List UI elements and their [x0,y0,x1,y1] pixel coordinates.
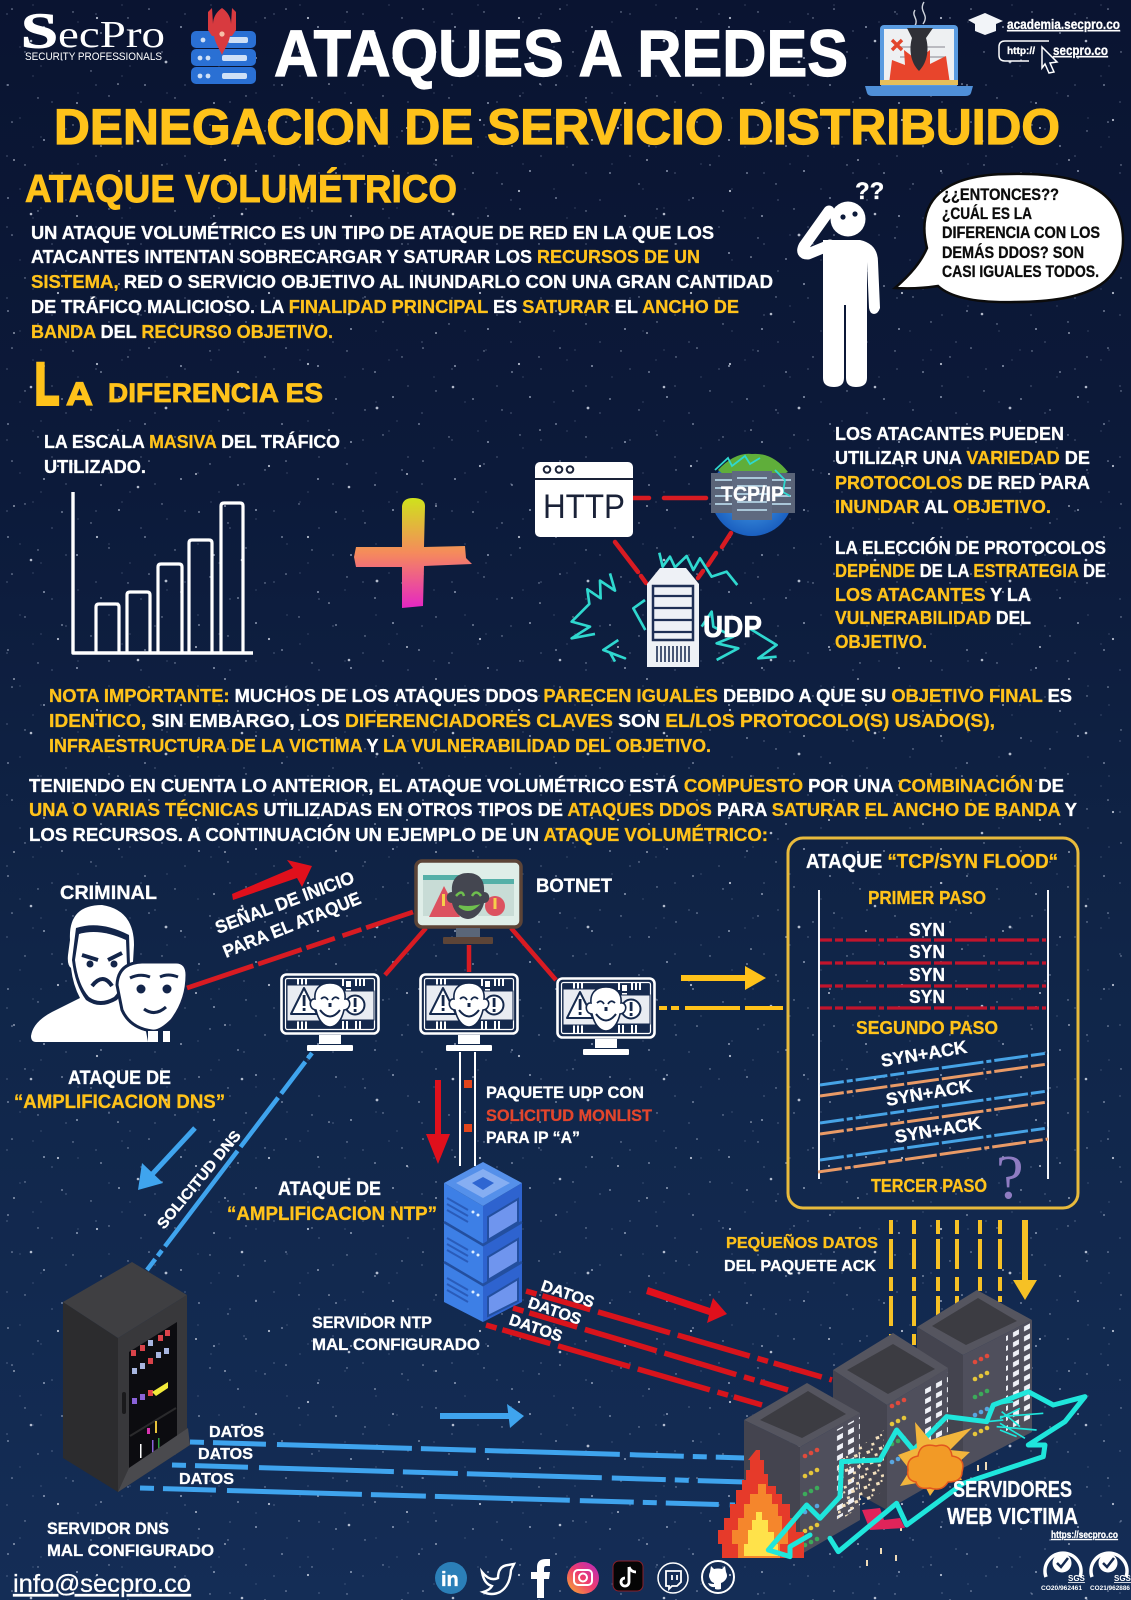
syn packets [909,920,945,1007]
label: misconfigured dns server: SERVIDOR DNS [47,1519,169,1538]
label: victim web servers: WEB VICTIMA [947,1503,1078,1529]
text block: composition of attack: UNA O VARIAS TÉCNICAS UTILIZADAS EN OTROS TIPOS DE ATAQUES DDOS PARA SATURAR EL ANCHO DE BANDA Y [29,799,1077,820]
icon: linkedin [435,1562,467,1594]
syn packets: SYN [909,987,945,1007]
text block: composition of attack: LOS RECURSOS. A CONTINUACIÓN UN EJEMPLO DE UN ATAQUE VOLUMÉTRICO: [29,824,768,845]
speech bubble: DEMÁS DDOS? SON [942,243,1084,262]
text block: udp packet [486,1083,653,1147]
text block: massive scale [44,431,340,477]
links: academia and secpro [968,13,1120,73]
rack 3 [917,1290,1032,1468]
social icons [435,1559,734,1598]
heading: la diferencia es [35,352,323,417]
icon: pixel fire [718,1450,804,1558]
rails [819,890,1048,1179]
icon: address box [999,41,1049,61]
labels: ntp data: DATOS [507,1312,565,1346]
logo: SecPro: S [21,2,58,58]
text block: important note: NOTA IMPORTANTE: MUCHOS DE LOS ATAQUES DDOS PARECEN IGUALES DEBIDO A QUE SU OBJETIVO FINAL ES [49,686,1072,706]
syn ack labels: SYN+ACK [884,1076,973,1110]
debris [838,1430,987,1566]
icon: twitch [658,1563,688,1593]
icon: confused person: ?? [855,178,884,205]
label: misconfigured ntp server [312,1313,480,1354]
heading: ataque volumetrico: ATAQUE VOLUMÉTRICO [25,167,457,211]
icon: cursor [1042,47,1057,73]
text block: definition: UN ATAQUE VOLUMÉTRICO ES UN TIPO DE ATAQUE DE RED EN LA QUE LOS [31,222,714,243]
heading: attack name: ATAQUE “TCP/SYN FLOOD“ [806,851,1058,873]
labels: dns data: DATOS [209,1424,264,1441]
syn packets: SYN [909,942,945,962]
text block: protocols: UTILIZAR UNA VARIEDAD DE [835,448,1090,468]
icon: ntp server [444,1162,522,1322]
icon: criminal with mask [31,905,187,1042]
icon: lightning bolt around servers [768,1392,1085,1557]
badge 2 [1091,1553,1127,1577]
label: misconfigured ntp server: SERVIDOR NTP [312,1313,432,1332]
arrow: ack flow [1013,1220,1037,1300]
contact email: info@secpro.co [13,1570,191,1598]
icon: botnet monitor [416,861,521,944]
step two: SEGUNDO PASO [856,1018,998,1038]
dashed line: dns request [147,1053,312,1270]
icon: instagram [567,1562,599,1594]
labels: ntp data [507,1278,597,1346]
dashed lines: dns data [140,1442,745,1505]
diagram: protocols [535,454,795,667]
arrow: dns direction [138,1128,195,1190]
text block: protocols: OBJETIVO. [835,632,927,652]
connector: http to tcp/ip [633,496,706,500]
icon: dns server rack [63,1262,190,1492]
label: small ack data [724,1232,878,1275]
label: botnet: BOTNET [536,876,612,897]
badge: sgs certifications: SGS [1114,1574,1131,1583]
connector: http to udp [615,542,646,583]
badge: sgs certifications [1041,1553,1131,1592]
panel: tcp syn flood [788,838,1078,1212]
icon: zombie monitor 3 [558,978,654,1055]
icon: lightning scribbles [572,553,777,662]
connector: tcp/ip to udp [698,533,731,578]
label: victim web servers [947,1476,1078,1529]
icon: http window: HTTP [543,488,625,526]
label: small ack data: DEL PAQUETE ACK [724,1258,876,1275]
badge: sgs certifications: CO20/962461 [1041,1585,1082,1592]
text block: protocols [835,424,1106,652]
label: dns amplification: “AMPLIFICACION DNS” [14,1092,225,1113]
dashed lines: ntp data [486,1291,832,1405]
arrow: ntp data direction [646,1287,727,1323]
label: ntp amplification [227,1179,437,1225]
text block: udp packet: SOLICITUD MONLIST [486,1106,653,1125]
label: ntp amplification: ATAQUE DE [278,1179,381,1200]
syn ack labels: SYN+ACK [879,1037,968,1071]
icon: victim web servers [744,1290,1032,1566]
red syn lines [820,940,1046,1008]
logo: SecPro [21,2,165,63]
rack 2 [833,1333,948,1510]
label: start signal: SEÑAL DE INICIO [212,866,357,938]
label: dns amplification [14,1068,225,1113]
icon: http window [535,462,633,537]
speech bubble: ¿¿ENTONCES?? [942,186,1059,204]
text block: definition: SISTEMA, RED O SERVICIO OBJETIVO AL INUNDARLO CON UNA GRAN CANTIDAD [31,272,773,292]
icon: server stack with rocket [191,8,256,84]
text block: important note [49,686,1072,756]
text block: important note: INFRAESTRUCTURA DE LA VICTIMA Y LA VULNERABILIDAD DEL OBJETIVO. [49,736,711,756]
title: ATAQUES A REDES [274,16,848,90]
speech bubble: DIFERENCIA CON LOS [942,224,1100,242]
sgs text: SGS [1068,1574,1086,1583]
speech bubble: ¿CUÁL ES LA [942,204,1032,223]
bar chart: traffic growth [73,492,253,653]
badge 1 [1045,1553,1081,1577]
syn packets: SYN [909,920,945,940]
labels: ntp data: DATOS [526,1295,584,1329]
text block: definition: DE TRÁFICO MALICIOSO. LA FINALIDAD PRINCIPAL ES SATURAR EL ANCHO DE [31,296,739,317]
speech bubble [895,174,1123,302]
blue syn ack lines [820,1053,1048,1160]
text block: massive scale: LA ESCALA MASIVA DEL TRÁFICO [44,431,340,452]
labels: ntp data: DATOS [539,1278,597,1312]
dashed line: criminal to botnet [187,912,413,988]
label: misconfigured dns server [47,1519,214,1560]
arrow: udp packet direction [426,1080,450,1164]
step one: PRIMER PASO [868,888,986,908]
syn packets: SYN [909,965,945,985]
label: start signal: PARA EL ATAQUE [220,888,364,962]
text block: protocols: LOS ATACANTES PUEDEN [835,424,1064,444]
label: dns amplification: ATAQUE DE [68,1068,171,1089]
speech bubble: CASI IGUALES TODOS. [942,263,1099,281]
icon: laptop with bomb [865,2,973,96]
label: ntp amplification: “AMPLIFICACION NTP” [227,1204,437,1225]
icon: zombie monitor 1 [282,974,378,1051]
text block: udp packet: PARA IP “A” [486,1128,580,1147]
syn ack labels: SYN+ACK [893,1113,982,1147]
heading: la diferencia es: A [66,376,93,412]
text block: protocols: LA ELECCIÓN DE PROTOCOLOS [835,537,1106,558]
heading: la diferencia es: DIFERENCIA ES [108,378,323,408]
step three: TERCER PASO [871,1176,987,1196]
text block: massive scale: UTILIZADO. [44,457,146,477]
dashed line: zombie to syn flood [659,1006,788,1010]
text block: protocols: VULNERABILIDAD DEL [835,608,1031,628]
arrow: dns data direction [440,1404,524,1428]
label: dns request: SOLICITUD DNS [154,1128,245,1233]
icon: confused person [803,178,884,387]
icon: tiktok [613,1561,643,1591]
http label: http:// [1007,46,1035,57]
icon: tcp/ip globe [711,454,795,536]
text block: udp packet: PAQUETE UDP CON [486,1083,644,1102]
text block: composition of attack: TENIENDO EN CUENTA LO ANTERIOR, EL ATAQUE VOLUMÉTRICO ESTÁ COMPUESTO POR UNA COMBINACIÓN DE [29,775,1064,796]
label: misconfigured dns server: MAL CONFIGURADO [47,1541,214,1560]
label: criminal: CRIMINAL [60,883,157,904]
heading: la diferencia es: L [35,352,59,417]
label: udp: UDP [703,609,762,644]
text block: important note: IDENTICO, SIN EMBARGO, LOS DIFERENCIADORES CLAVES SON EL/LOS PROTOCOLO(S) USADO(S), [49,711,995,731]
text block: definition: ATACANTES INTENTAN SOBRECARGAR Y SATURAR LOS RECURSOS DE UN [31,247,700,267]
arrow: to syn flood [681,966,766,990]
secpro link: secpro.co [1053,42,1108,58]
red sparks [862,1508,905,1530]
syn ack labels [879,1037,982,1147]
icon: question mark: ? [996,1144,1024,1212]
icon: explosion [898,1422,972,1496]
badge: sgs certifications: CO21/962886 [1090,1585,1130,1592]
text block: protocols: DEPENDE DE LA ESTRATEGIA DE [835,561,1106,581]
orange ack lines [818,1064,1048,1172]
text block: protocols: LOS ATACANTES Y LA [835,585,1031,605]
labels: dns data: DATOS [198,1446,253,1463]
label: misconfigured ntp server: MAL CONFIGURADO [312,1335,480,1354]
icon: tcp/ip globe: TCP/IP [721,483,784,506]
label: victim web servers: SERVIDORES [953,1476,1072,1502]
link: udp packet tube [460,1052,475,1166]
icon: cyan sparks [987,1402,1043,1438]
icon: udp server [647,568,699,667]
text block: protocols: PROTOCOLOS DE RED PARA [835,473,1090,493]
subtitle: DENEGACION DE SERVICIO DISTRIBUIDO [54,99,1060,155]
icon: github [702,1561,734,1593]
icon: twitter [482,1564,514,1594]
icon: graduation cap [968,13,1003,35]
labels: dns data [179,1424,264,1488]
text block: protocols: INUNDAR AL OBJETIVO. [835,497,1051,517]
logo: SecPro: ecPro [58,14,165,56]
text block: definition [31,222,773,342]
logo: SecPro: SECURITY PROFESSIONALS [25,51,162,63]
rack 1 [744,1383,860,1555]
connectors: botnet to zombies [385,928,556,980]
dashed lines: ack data [891,1220,1000,1345]
icon: zombie monitor 2 [420,974,518,1051]
icon: facebook [531,1559,550,1598]
icon: gradient plus [354,498,472,608]
arrow: attack start signal [232,860,312,900]
text block: definition: BANDA DEL RECURSO OBJETIVO. [31,322,333,342]
icon: linkedin: in [441,1569,459,1591]
label: small ack data: PEQUEÑOS DATOS [726,1232,878,1252]
text block: composition of attack [29,775,1077,845]
labels: dns data: DATOS [179,1471,234,1488]
